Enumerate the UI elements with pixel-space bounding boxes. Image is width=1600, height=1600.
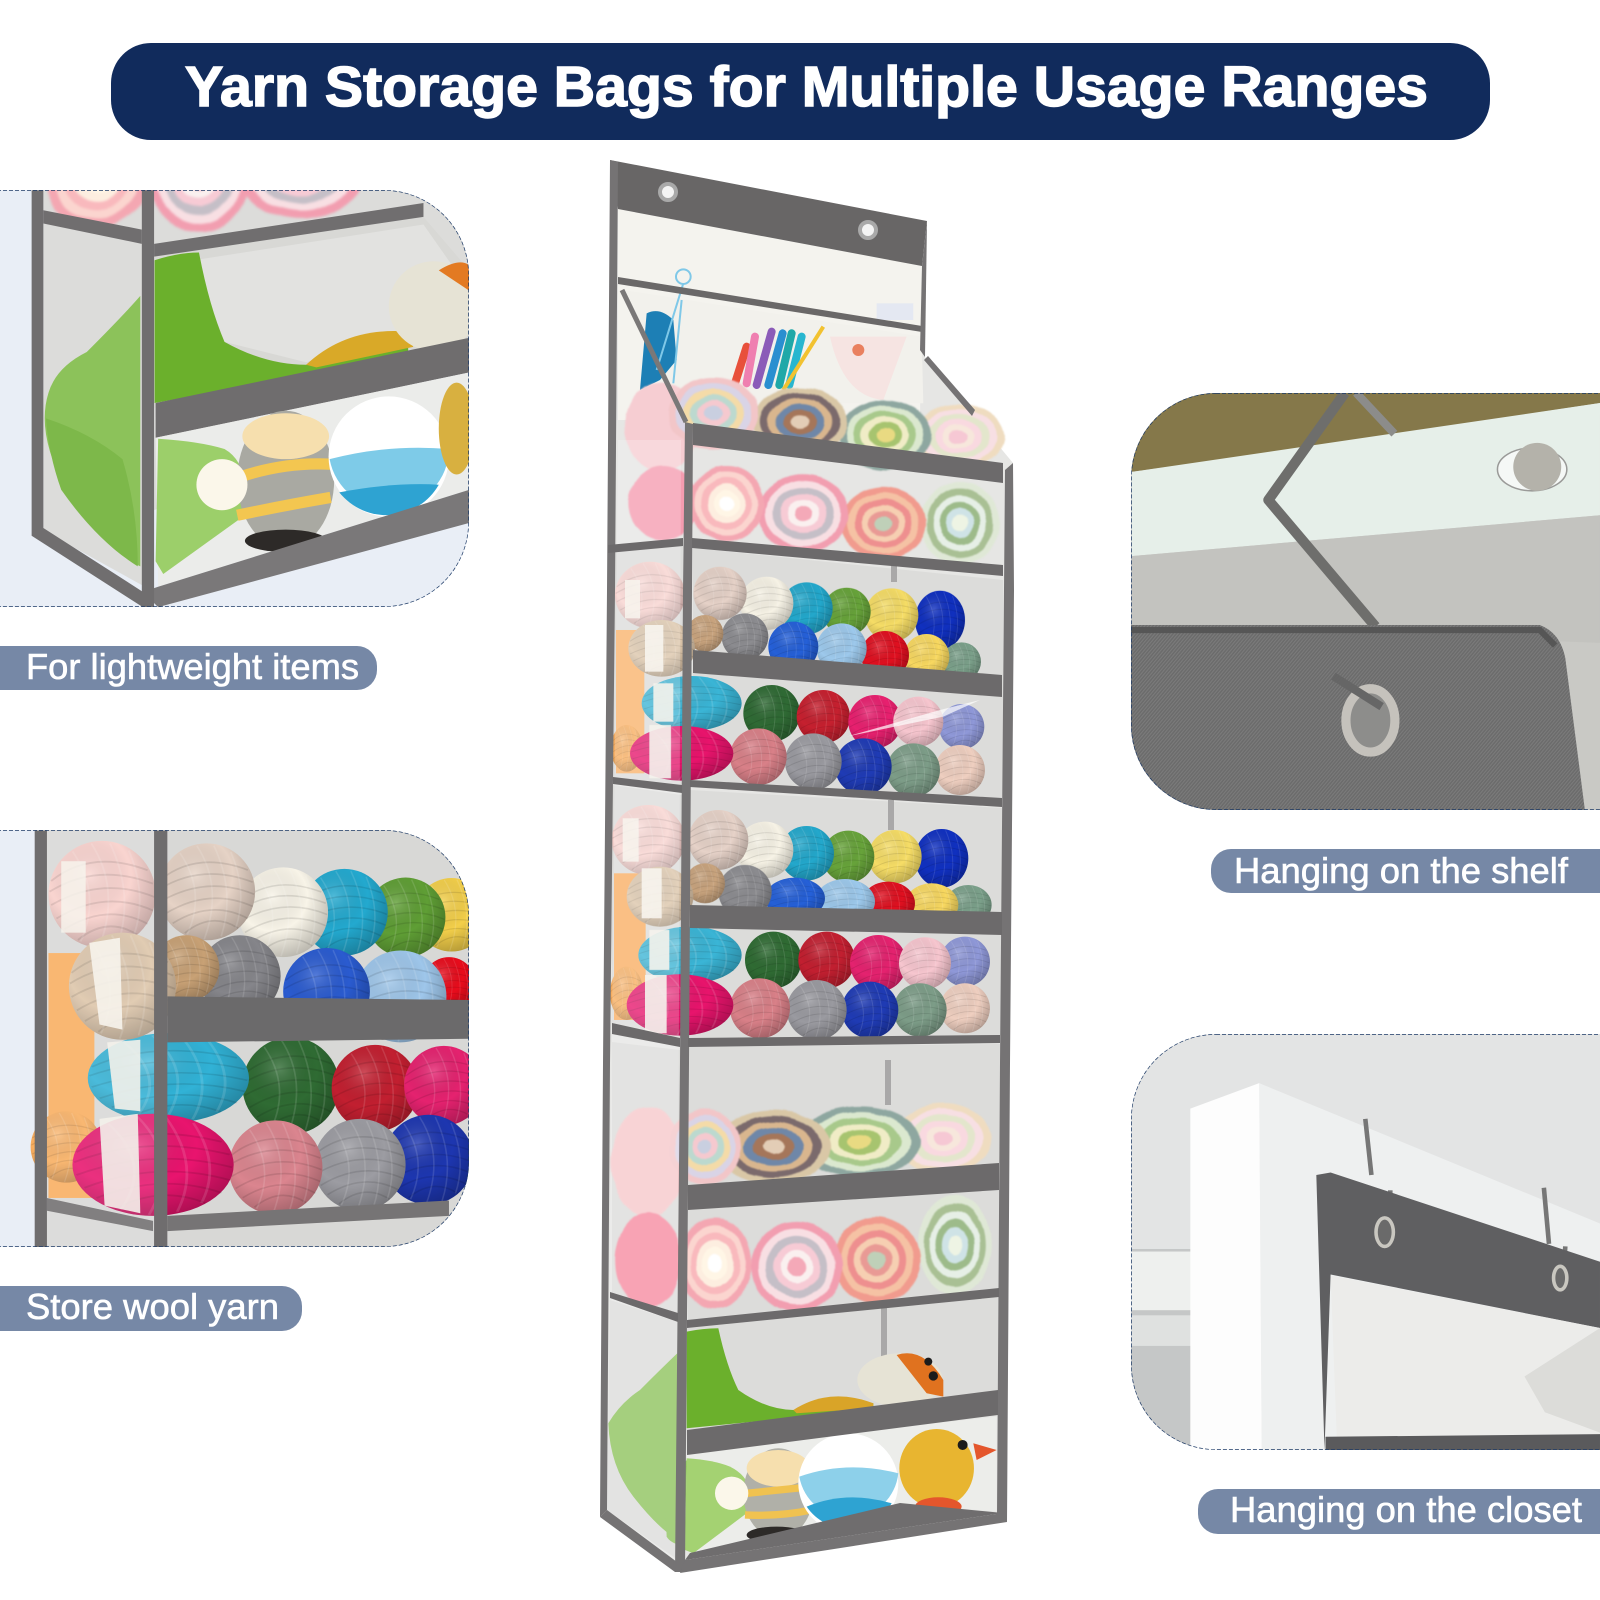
floor xyxy=(167,1201,449,1231)
label: hanging on the closet: Hanging on the closet xyxy=(1230,1489,1582,1530)
under shelf xyxy=(1132,515,1600,556)
yarn balls xyxy=(31,841,488,1216)
compartments two and three wool yarn xyxy=(610,562,992,1040)
grommet xyxy=(1333,676,1395,752)
floor xyxy=(685,1503,1003,1560)
fabric frame xyxy=(600,160,1014,1573)
fabric header xyxy=(1127,625,1586,816)
title banner xyxy=(111,43,1490,140)
white shelf bar xyxy=(1132,403,1600,556)
bag bottom strip xyxy=(1326,1434,1600,1450)
compartment backs xyxy=(607,545,1003,1560)
panel: hanging on the closet close-up xyxy=(1131,1034,1600,1453)
pink yarn above shelf xyxy=(47,190,360,233)
bag header xyxy=(1316,1172,1600,1451)
back panel xyxy=(602,205,1013,1570)
front band xyxy=(156,338,469,438)
label: for lightweight items: For lightweight items xyxy=(26,646,359,687)
compartment four yarn cakes xyxy=(611,1103,992,1312)
panel: hanging on the shelf close-up xyxy=(1127,393,1600,816)
back seams xyxy=(881,560,897,1365)
green knit toy xyxy=(45,253,413,566)
clear window xyxy=(1330,1276,1600,1328)
hooks xyxy=(1363,1118,1568,1251)
title banner: Yarn Storage Bags for Multiple Usage Ranges xyxy=(185,55,1428,119)
hanging organizer product xyxy=(600,160,1014,1573)
screw xyxy=(1497,443,1567,491)
metal hook xyxy=(1268,393,1394,627)
frame xyxy=(32,190,423,607)
side panel haze xyxy=(47,861,154,1216)
compartment five crochet toys xyxy=(608,1328,997,1553)
crochet owl xyxy=(389,262,469,348)
plastic glare xyxy=(847,700,980,737)
header band xyxy=(610,160,927,266)
panel: store wool yarn close-up xyxy=(0,830,488,1247)
pocket seam xyxy=(618,277,922,332)
door xyxy=(1190,1083,1600,1451)
frame xyxy=(35,831,167,1247)
lower pocket contents xyxy=(156,372,474,587)
grommets xyxy=(1376,1218,1567,1290)
compartment one yarn cakes xyxy=(625,377,1004,565)
front bands and shelves xyxy=(608,423,1003,1455)
label: hanging on the shelf: Hanging on the shelf xyxy=(1234,850,1569,891)
ceiling xyxy=(1131,393,1600,472)
wall molding xyxy=(1131,1249,1191,1451)
panel: for lightweight items close-up xyxy=(0,190,469,607)
diagonal pocket edge xyxy=(622,290,686,422)
front band xyxy=(167,996,469,1042)
label: store wool yarn: Store wool yarn xyxy=(26,1286,279,1327)
clear upper window xyxy=(618,209,922,420)
tool pocket with needles and hooks xyxy=(623,269,923,403)
grommets xyxy=(660,184,876,238)
floor xyxy=(143,490,469,607)
side panel haze xyxy=(607,440,681,1562)
